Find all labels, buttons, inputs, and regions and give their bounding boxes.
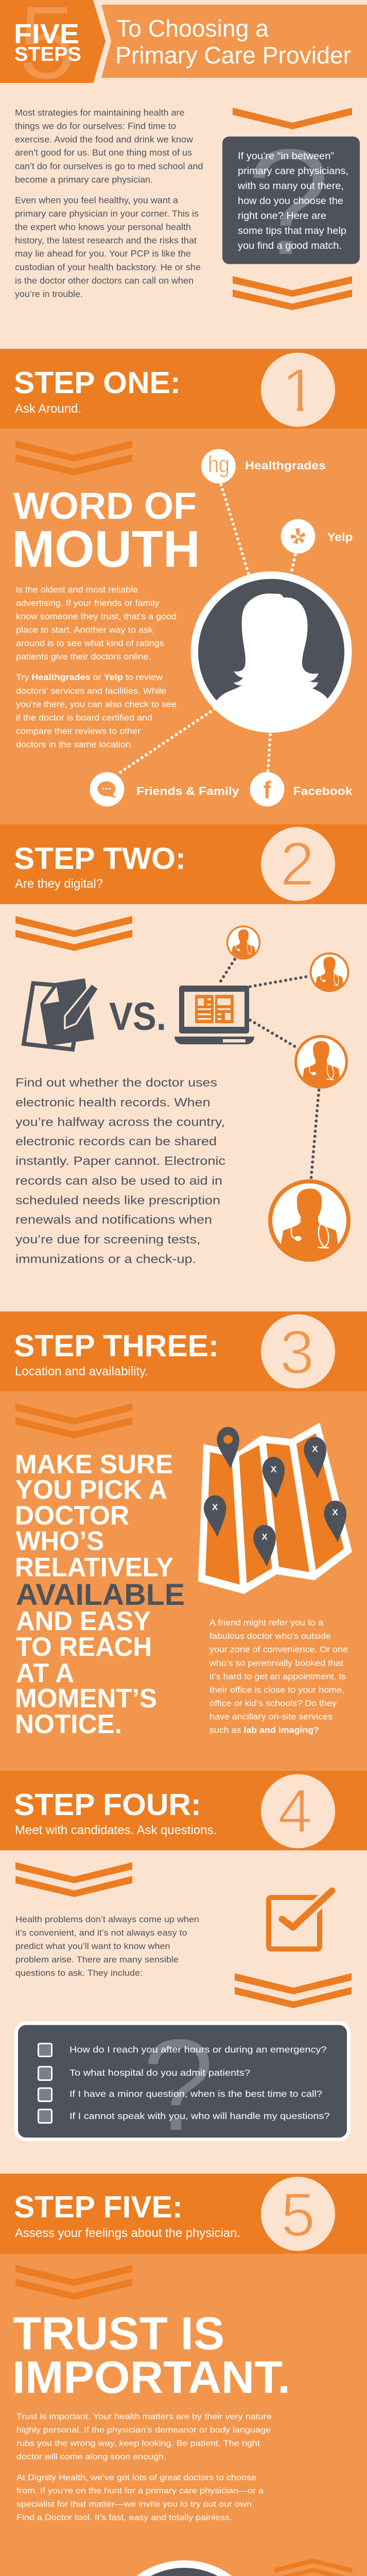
body text: place to start. Another way to ask bbox=[16, 625, 153, 635]
step one header: STEP ONE: bbox=[14, 366, 181, 400]
step three header: 3 bbox=[280, 1318, 314, 1387]
chevrons bbox=[15, 440, 132, 476]
map with pins: X bbox=[312, 1444, 318, 1454]
side text: have ancillary on-site services bbox=[209, 1713, 333, 1722]
icon: friends and family bbox=[90, 772, 239, 806]
body text: Trust is important. Your health matters are by their very nature bbox=[16, 2412, 272, 2421]
map with pins: X bbox=[212, 1502, 218, 1512]
icon: paper records bbox=[24, 978, 99, 1049]
question 2: To what hospital do you admit patients? bbox=[69, 2067, 250, 2078]
body text: you’re there, you can also check to see bbox=[16, 700, 177, 709]
heading: trust is important: IMPORTANT. bbox=[12, 2352, 290, 2403]
callout: question: If you’re “in between” bbox=[238, 150, 334, 162]
step two header: STEP TWO: bbox=[14, 842, 186, 876]
step five header bbox=[0, 2174, 367, 2253]
map with pins: X bbox=[271, 1464, 277, 1475]
intro text: exercise. Avoid the food and drink we know bbox=[15, 134, 193, 144]
headline: YOU PICK A bbox=[15, 1475, 167, 1505]
headline: AND EASY bbox=[16, 1606, 151, 1636]
body text: Find out whether the doctor uses bbox=[15, 1076, 217, 1089]
body text: you’re halfway across the country, bbox=[15, 1115, 225, 1128]
headline: WHO’S bbox=[16, 1526, 104, 1556]
body text: doctors’ services and facilities. While bbox=[16, 686, 166, 696]
body text: specialist for that matter—we invite you to try out our own bbox=[16, 2500, 252, 2509]
question 4: If I cannot speak with you, who will handle my questions? bbox=[69, 2111, 330, 2121]
panel: header banner bbox=[0, 0, 367, 101]
body text: Try Healthgrades or Yelp to review bbox=[16, 673, 163, 682]
title: Primary Care Provider bbox=[115, 42, 351, 69]
dotted connectors bbox=[119, 485, 295, 773]
body text: advertising. If your friends or family bbox=[16, 599, 160, 608]
side text bbox=[209, 1618, 348, 1735]
five steps badge: FIVE bbox=[14, 19, 79, 49]
body text: questions to ask. They include: bbox=[15, 1969, 143, 1978]
vs label: VS. bbox=[109, 995, 166, 1039]
body text: doctor will come along soon enough. bbox=[16, 2453, 166, 2462]
icon: checkbox bbox=[269, 1891, 332, 1949]
map with pins: X bbox=[332, 1507, 338, 1517]
body text: around is to see what kind of ratings bbox=[16, 639, 164, 648]
body text: patients give their doctors online. bbox=[16, 652, 151, 662]
chevrons right bbox=[235, 1973, 352, 2008]
intro text: can’t do for ourselves is go to med school and bbox=[15, 161, 203, 172]
panel: step three bbox=[0, 1312, 367, 1771]
intro text: things we do for ourselves: Find time to bbox=[15, 121, 176, 131]
step three header: STEP THREE: bbox=[14, 1329, 219, 1363]
step one header: 1 bbox=[282, 356, 316, 425]
step four header: Meet with candidates. Ask questions. bbox=[15, 1823, 217, 1837]
body text: predict what you’ll want to know when bbox=[15, 1942, 170, 1951]
intro text: Even when you feel healthy, you want a bbox=[15, 195, 178, 206]
icon: facebook: Facebook bbox=[293, 785, 353, 798]
body text: renewals and notifications when bbox=[15, 1213, 212, 1226]
icon: doctor 2 bbox=[310, 953, 349, 992]
side text: fabulous doctor who’s outside bbox=[209, 1632, 331, 1641]
body text: instantly. Paper cannot. Electronic bbox=[15, 1154, 225, 1167]
intro text: history, the latest research and the risks that bbox=[15, 235, 197, 245]
step one header: Ask Around. bbox=[15, 402, 81, 416]
body text: scheduled needs like prescription bbox=[15, 1194, 220, 1207]
icon: friends and family: Friends & Family bbox=[136, 785, 239, 798]
side text: office or kid’s schools? Do they bbox=[209, 1699, 337, 1708]
step five header: Assess your feelings about the physician. bbox=[15, 2226, 240, 2240]
step two header: 2 bbox=[280, 829, 314, 899]
headline: AT A bbox=[16, 1658, 74, 1688]
body text: records can also be used to aid in bbox=[15, 1174, 222, 1187]
side text: A friend might refer you to a bbox=[209, 1618, 324, 1628]
icon: laptop with records bbox=[174, 986, 254, 1044]
intro text: may lie ahead for you. Your PCP is like the bbox=[15, 248, 191, 259]
icon: yelp bbox=[281, 519, 353, 553]
question 2 bbox=[38, 2067, 250, 2080]
step four header: STEP FOUR: bbox=[14, 1788, 201, 1822]
heading: word of mouth: MOUTH bbox=[12, 520, 200, 578]
step two header: Are they digital? bbox=[15, 877, 103, 891]
side text: their office is close to your home, bbox=[209, 1686, 344, 1695]
body text: rubs you the wrong way, keep looking. Be patient. The right bbox=[16, 2439, 260, 2448]
heading: word of mouth bbox=[12, 485, 200, 578]
body text: if the doctor is board certified and bbox=[16, 713, 152, 722]
five steps badge: STEPS bbox=[14, 43, 81, 65]
panel: step one bbox=[0, 349, 367, 824]
icon: healthgrades bbox=[201, 449, 326, 483]
map with pins bbox=[198, 1422, 352, 1594]
step three header bbox=[0, 1312, 367, 1391]
body text bbox=[15, 1915, 199, 1978]
icon: doctor 4 bbox=[268, 1179, 351, 1262]
icon: doctor 3 bbox=[294, 1035, 348, 1089]
step five header: 5 bbox=[281, 2180, 315, 2249]
intro text: Most strategies for maintaining health are bbox=[15, 107, 184, 117]
question 3 bbox=[38, 2088, 322, 2101]
body text: At Dignity Health, we’ve got lots of great doctors to choose bbox=[16, 2473, 256, 2482]
body text: it’s convenient, and it’s not always easy to bbox=[15, 1928, 187, 1938]
callout: question: you find a good match. bbox=[238, 240, 342, 251]
side text: who’s so perennially booked that bbox=[209, 1658, 343, 1668]
question 4 bbox=[38, 2109, 330, 2123]
intro text: become a primary care physician. bbox=[15, 174, 153, 184]
icon: facebook bbox=[250, 772, 353, 806]
callout: question bbox=[222, 116, 360, 288]
dotted connectors bbox=[219, 959, 319, 1178]
double chevron below callout bbox=[233, 276, 352, 310]
side text: such as lab and imaging? bbox=[209, 1726, 319, 1735]
panel: step five bbox=[0, 2174, 367, 2576]
body text: problem arise. There are many sensible bbox=[15, 1955, 179, 1964]
callout: questions bbox=[16, 2010, 349, 2159]
five steps badge bbox=[0, 0, 106, 101]
body text bbox=[16, 2412, 272, 2522]
side text: it’s hard to get an appointment. Is bbox=[209, 1672, 346, 1681]
question 1: How do I reach you after hours or during an emergency? bbox=[69, 2044, 327, 2055]
body text: electronic health records. When bbox=[15, 1095, 211, 1109]
intro text: aren’t good for us. But one thing most of us bbox=[15, 147, 192, 158]
callout: questions: ? bbox=[141, 2010, 215, 2159]
chevrons up bbox=[274, 2558, 352, 2576]
headline: MOMENT’S bbox=[15, 1684, 157, 1714]
headline: DOCTOR bbox=[15, 1501, 129, 1531]
step three header: Location and availability. bbox=[15, 1365, 148, 1379]
title banner bbox=[101, 5, 367, 78]
headline: AVAILABLE bbox=[16, 1578, 185, 1612]
body text: compare their reviews to other bbox=[16, 726, 141, 736]
chevrons bbox=[15, 916, 132, 951]
chevrons bbox=[15, 2265, 132, 2300]
heading: word of mouth: WORD OF bbox=[13, 485, 197, 527]
question 1 bbox=[38, 2043, 327, 2057]
body text: you’re due for screening tests, bbox=[15, 1232, 201, 1246]
body text: immunizations or a check-up. bbox=[15, 1252, 196, 1265]
headline: RELATIVELY bbox=[15, 1552, 173, 1582]
body text: Health problems don’t always come up when bbox=[15, 1915, 199, 1924]
headline: NOTICE. bbox=[15, 1709, 122, 1739]
icon: yelp: Yelp bbox=[327, 531, 353, 544]
body text bbox=[15, 1076, 225, 1265]
intro text: custodian of your health backstory. He or she bbox=[15, 262, 201, 272]
map with pins: X bbox=[261, 1532, 268, 1541]
panel: introduction bbox=[15, 107, 360, 310]
step four header bbox=[0, 1771, 367, 1851]
callout: question: ? bbox=[246, 116, 331, 288]
headline: MAKE SURE bbox=[15, 1449, 173, 1479]
panel: step two bbox=[0, 824, 367, 1312]
intro text: is the doctor other doctors can call on when bbox=[15, 275, 194, 285]
intro text bbox=[15, 107, 203, 299]
question 3: If I have a minor question, when is the best time to call? bbox=[69, 2089, 322, 2099]
intro text: primary care physician in your corner. This is bbox=[15, 208, 199, 218]
step two header bbox=[0, 824, 367, 904]
panel: step four bbox=[0, 1771, 367, 2174]
icon: facebook: f bbox=[263, 776, 271, 803]
body text: Find a Doctor tool. It’s fast, easy and totally painless. bbox=[16, 2514, 232, 2522]
side text: your zone of convenience. Or one bbox=[209, 1645, 348, 1654]
title: To Choosing a bbox=[116, 15, 269, 42]
callout: question: how do you choose the bbox=[238, 195, 343, 207]
chevron above callout bbox=[233, 108, 352, 129]
body text: from. If you’re on the hunt for a primary care physician—or a bbox=[16, 2487, 264, 2496]
step one header bbox=[0, 349, 367, 429]
body text: doctors in the same location. bbox=[16, 740, 133, 750]
body text: know someone they trust, that’s a good bbox=[16, 612, 177, 621]
person portrait bbox=[190, 571, 352, 733]
callout: question: primary care physicians, bbox=[238, 165, 348, 177]
icon: healthgrades: Healthgrades bbox=[245, 459, 326, 472]
icon: doctor 1 bbox=[226, 925, 260, 959]
step four header: 4 bbox=[278, 1776, 312, 1845]
icon: healthgrades: hg bbox=[208, 451, 230, 478]
body text: highly personal. If the physician’s demeanor or body language bbox=[16, 2426, 271, 2435]
callout: question: some tips that may help bbox=[238, 225, 346, 236]
step five header: STEP FIVE: bbox=[14, 2190, 183, 2224]
body text: is the oldest and most reliable bbox=[16, 585, 138, 595]
headline bbox=[15, 1449, 185, 1739]
body text bbox=[16, 585, 177, 750]
title bbox=[115, 15, 351, 69]
chevrons bbox=[15, 1862, 132, 1897]
body text: electronic records can be shared bbox=[15, 1134, 217, 1148]
heading: trust is important bbox=[12, 2308, 290, 2403]
headline: TO REACH bbox=[16, 1632, 152, 1662]
heading: trust is important: TRUST IS bbox=[13, 2308, 224, 2360]
callout: question: with so many out there, bbox=[237, 180, 344, 192]
intro text: the expert who knows your personal health bbox=[15, 222, 191, 232]
intro text: you’re in trouble. bbox=[15, 289, 83, 299]
callout: question: right one? Here are bbox=[238, 210, 326, 222]
chevrons bbox=[15, 1403, 132, 1438]
person portrait bbox=[104, 2561, 265, 2576]
